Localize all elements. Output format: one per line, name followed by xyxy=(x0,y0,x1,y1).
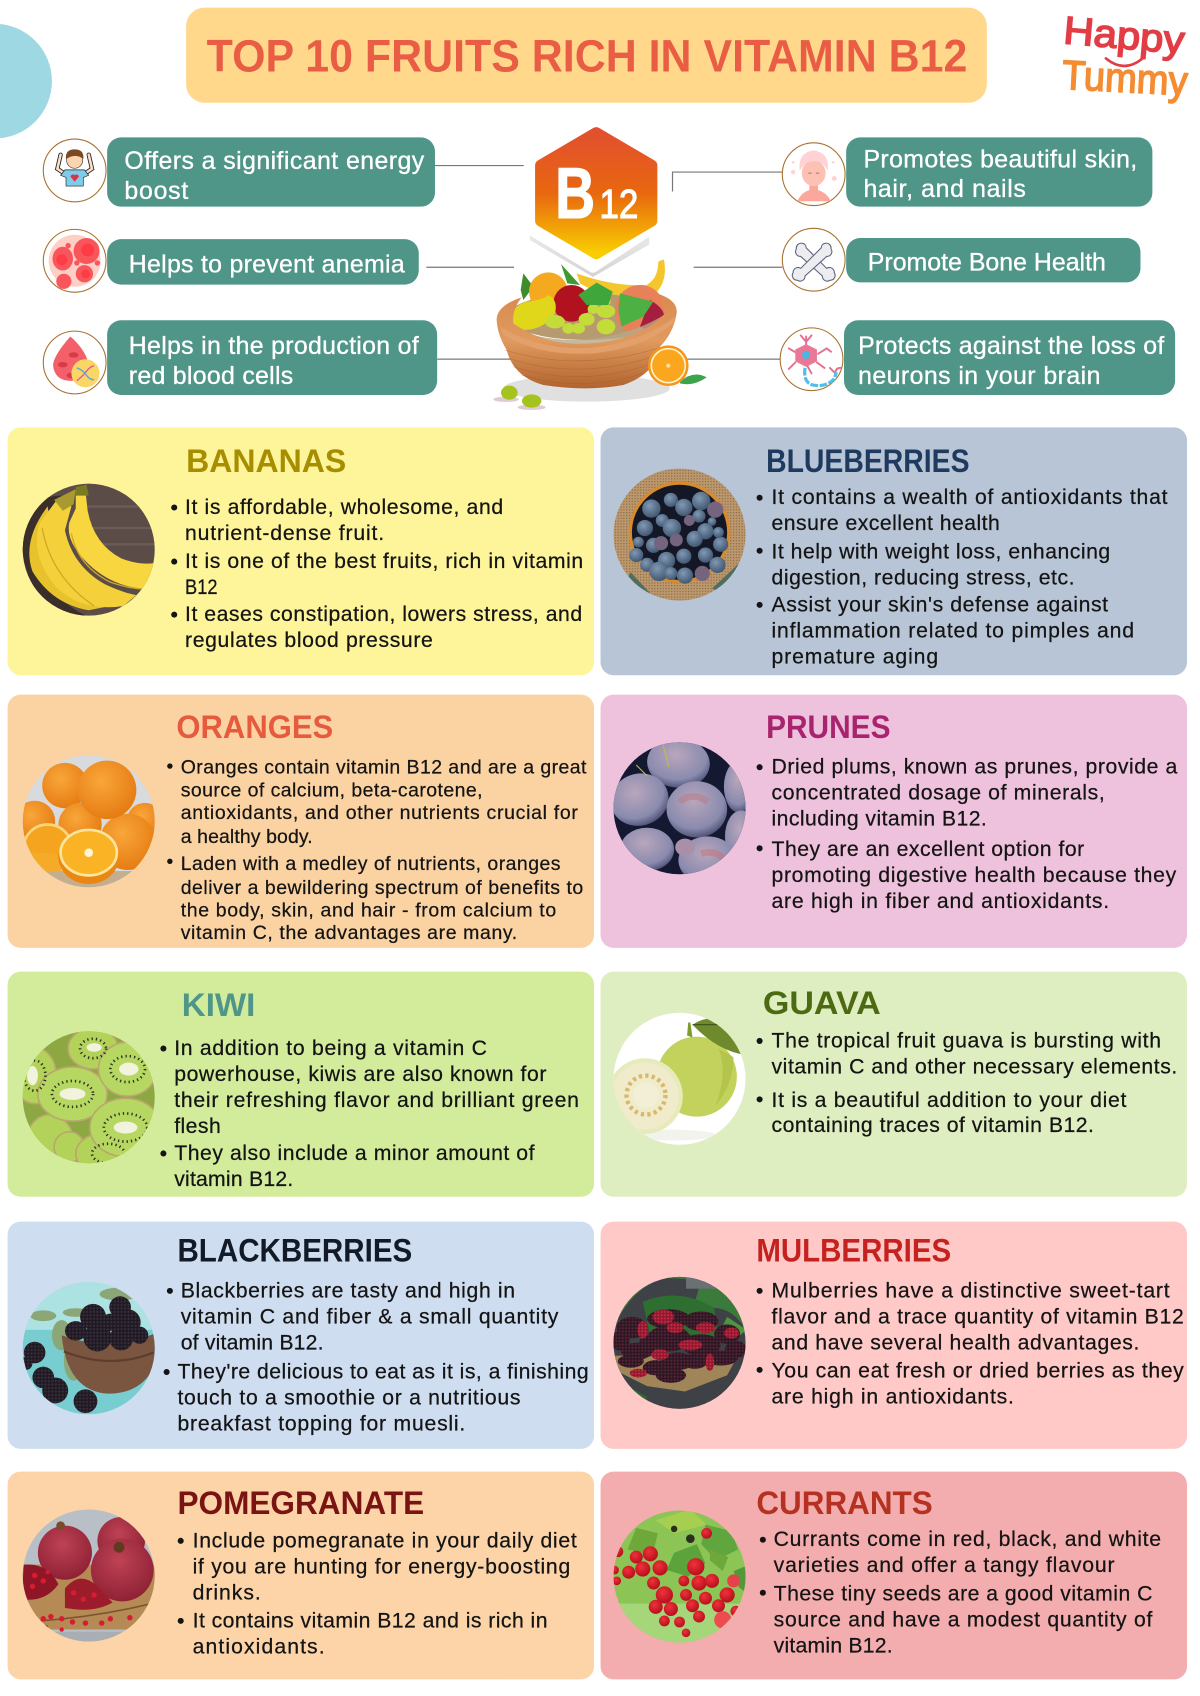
text: powerhouse, kiwis are also known for xyxy=(174,1063,546,1086)
heading: ORANGES xyxy=(176,709,333,745)
text: vitamin B12. xyxy=(774,1634,893,1657)
pill text xyxy=(107,320,437,395)
pill text xyxy=(846,137,1152,207)
icon: neuron xyxy=(780,328,843,391)
pill text: Offers a significant energy xyxy=(124,147,425,175)
icon: blood cells xyxy=(43,229,106,292)
heading: CURRANTS xyxy=(756,1485,933,1521)
bullets xyxy=(757,495,763,608)
photo: prunes xyxy=(614,742,746,874)
text: Assist your skin's defense against xyxy=(772,593,1108,616)
text: Include pomegranate in your daily diet xyxy=(193,1529,577,1552)
text: vitamin C, the advantages are many. xyxy=(181,922,517,944)
benefit: prevent anemia xyxy=(43,229,419,292)
text: flavor and a trace quantity of vitamin B12 xyxy=(772,1305,1184,1328)
photo: kiwi slices xyxy=(22,1031,155,1164)
text: containing traces of vitamin B12. xyxy=(772,1114,1094,1137)
text xyxy=(772,756,1177,913)
icon: woman face xyxy=(782,143,845,206)
text xyxy=(772,486,1168,668)
text: varieties and offer a tangy flavour xyxy=(774,1554,1115,1577)
pill text xyxy=(844,320,1175,395)
panel: guava xyxy=(601,972,1187,1197)
icon: crossed bones xyxy=(782,228,845,291)
heading: GUAVA xyxy=(763,985,881,1021)
text: vitamin B12. xyxy=(174,1168,293,1191)
logo: Happy Tummy: Tummy xyxy=(1061,52,1189,104)
text xyxy=(177,1279,589,1435)
text: They're delicious to eat as it is, a finishing xyxy=(177,1361,589,1384)
panel: prunes xyxy=(601,695,1187,948)
text: deliver a bewildering spectrum of benefits to xyxy=(181,877,583,899)
text: vitamin C and other necessary elements. xyxy=(772,1055,1177,1078)
title banner xyxy=(186,8,987,103)
text: source and have a modest quantity of xyxy=(774,1608,1152,1631)
text xyxy=(185,496,583,652)
text: a healthy body. xyxy=(181,826,313,848)
text: Oranges contain vitamin B12 and are a great xyxy=(181,757,587,779)
text: They also include a minor amount of xyxy=(174,1142,535,1165)
photo: mulberries xyxy=(610,1276,747,1410)
bullets xyxy=(164,1288,173,1375)
text xyxy=(174,1037,579,1191)
pill text: Helps in the production of xyxy=(129,332,419,360)
benefit: red blood cell production xyxy=(43,320,437,395)
heading: POMEGRANATE xyxy=(177,1485,424,1521)
B12 hexagon badge xyxy=(524,132,654,277)
panel: currants xyxy=(601,1472,1187,1679)
text: promoting digestive health because they xyxy=(772,864,1177,887)
photo: bananas xyxy=(22,483,156,617)
bullets xyxy=(760,1537,766,1596)
text: digestion, reducing stress, etc. xyxy=(772,566,1074,589)
bullets xyxy=(757,1038,763,1102)
heading: PRUNES xyxy=(766,709,891,745)
logo: Happy Tummy: Happy xyxy=(1062,9,1187,63)
text: These tiny seeds are a good vitamin C xyxy=(774,1582,1152,1605)
bullets xyxy=(167,763,173,864)
heading: BLACKBERRIES xyxy=(177,1233,412,1269)
B12 hexagon badge: 12 xyxy=(599,181,638,227)
text: Dried plums, known as prunes, provide a xyxy=(772,756,1177,779)
text: Blackberries are tasty and high in xyxy=(181,1279,515,1302)
text: It is a beautiful addition to your diet xyxy=(772,1089,1127,1112)
text: drinks. xyxy=(193,1581,261,1604)
photo: blueberries in bowl xyxy=(612,467,747,602)
pill text: Promotes beautiful skin, xyxy=(863,146,1137,174)
pill text: Protects against the loss of xyxy=(858,332,1164,360)
bullets xyxy=(160,1045,166,1156)
text: inflammation related to pimples and xyxy=(772,619,1134,642)
text: Laden with a medley of nutrients, oranges xyxy=(181,853,561,875)
text xyxy=(774,1528,1161,1657)
photo: blackberries in bowl xyxy=(19,1281,156,1415)
text: antioxidants, and other nutrients crucial for xyxy=(181,802,578,824)
text: nutrient-dense fruit. xyxy=(185,522,384,545)
text: You can eat fresh or dried berries as they xyxy=(772,1359,1184,1382)
pill text: neurons in your brain xyxy=(858,362,1100,390)
pill text: boost xyxy=(124,177,188,205)
panel: blueberries xyxy=(601,427,1187,675)
text: if you are hunting for energy-boosting xyxy=(193,1555,570,1578)
text: Mulberries have a distinctive sweet-tart xyxy=(772,1279,1170,1302)
text: the body, skin, and hair - from calcium to xyxy=(181,899,556,921)
pill text xyxy=(846,238,1140,282)
panel: oranges xyxy=(8,695,594,948)
panel: pomegranate xyxy=(8,1472,594,1679)
text: antioxidants. xyxy=(193,1635,325,1658)
text: B12 xyxy=(185,576,217,599)
text xyxy=(772,1029,1177,1137)
text: They are an excellent option for xyxy=(772,838,1084,861)
text: flesh xyxy=(174,1115,221,1138)
photo: oranges xyxy=(22,755,155,888)
photo: red currants xyxy=(610,1509,747,1647)
heading: MULBERRIES xyxy=(756,1233,951,1269)
heading: BANANAS xyxy=(186,443,346,479)
text: premature aging xyxy=(772,645,938,668)
pill text xyxy=(107,137,435,207)
text: and have several health advantages. xyxy=(772,1331,1139,1354)
text: of vitamin B12. xyxy=(181,1331,324,1354)
heading: KIWI xyxy=(182,987,255,1023)
text: It is one of the best fruits, rich in vitamin xyxy=(185,550,583,573)
text: regulates blood pressure xyxy=(185,629,433,652)
benefit: protect neurons xyxy=(780,320,1175,395)
text: It contains vitamin B12 and is rich in xyxy=(193,1609,548,1632)
heading: BLUEBERRIES xyxy=(766,443,970,479)
text: The tropical fruit guava is bursting with xyxy=(772,1029,1161,1052)
pill text: red blood cells xyxy=(129,362,293,390)
connector lines xyxy=(426,166,783,359)
text: are high in fiber and antioxidants. xyxy=(772,890,1109,913)
panel: kiwi xyxy=(8,972,594,1197)
pill text: Helps to prevent anemia xyxy=(129,251,405,279)
B12 hexagon badge: B xyxy=(555,153,595,234)
text: Currants come in red, black, and white xyxy=(774,1528,1161,1551)
text: It help with weight loss, enhancing xyxy=(772,540,1110,563)
bullets xyxy=(178,1538,184,1624)
panel: bananas xyxy=(8,427,594,675)
bullets xyxy=(757,1288,763,1373)
text: It eases constipation, lowers stress, and xyxy=(185,603,582,626)
panel: blackberries xyxy=(8,1222,594,1449)
text xyxy=(772,1279,1184,1408)
benefit: bone health xyxy=(782,228,1140,291)
text: It contains a wealth of antioxidants that xyxy=(772,486,1168,509)
text: vitamin C and fiber & a small quantity xyxy=(181,1305,559,1328)
icon: flexing boy xyxy=(43,139,106,202)
text: their refreshing flavor and brilliant green xyxy=(174,1089,579,1112)
text: ensure excellent health xyxy=(772,512,1000,535)
text: concentrated dosage of minerals, xyxy=(772,782,1105,805)
panel: mulberries xyxy=(601,1222,1187,1449)
text xyxy=(193,1529,577,1658)
icon: blood drop and DNA xyxy=(43,331,106,394)
photo: pomegranates xyxy=(22,1508,156,1645)
text: In addition to being a vitamin C xyxy=(174,1037,487,1060)
pill text xyxy=(107,239,419,285)
text: including vitamin B12. xyxy=(772,808,987,831)
bullets xyxy=(757,764,763,851)
fruit basket illustration xyxy=(493,259,707,410)
text: source of calcium, beta-carotene, xyxy=(181,779,483,801)
text: touch to a smoothie or a nutritious xyxy=(177,1386,520,1409)
bullets xyxy=(171,504,177,618)
photo: guava xyxy=(607,1012,747,1146)
text: breakfast topping for muesli. xyxy=(177,1412,465,1435)
title banner: TOP 10 FRUITS RICH IN VITAMIN B12 xyxy=(207,30,967,81)
text xyxy=(181,757,587,944)
logo: Happy Tummy xyxy=(1061,9,1189,104)
benefit: energy boost xyxy=(43,137,435,207)
pill text: hair, and nails xyxy=(863,175,1026,203)
benefit: skin, hair, nails xyxy=(782,137,1152,207)
text: It is affordable, wholesome, and xyxy=(185,496,503,519)
pill text: Promote Bone Health xyxy=(868,249,1106,277)
text: are high in antioxidants. xyxy=(772,1385,1014,1408)
decorative teal semicircle xyxy=(0,24,52,139)
